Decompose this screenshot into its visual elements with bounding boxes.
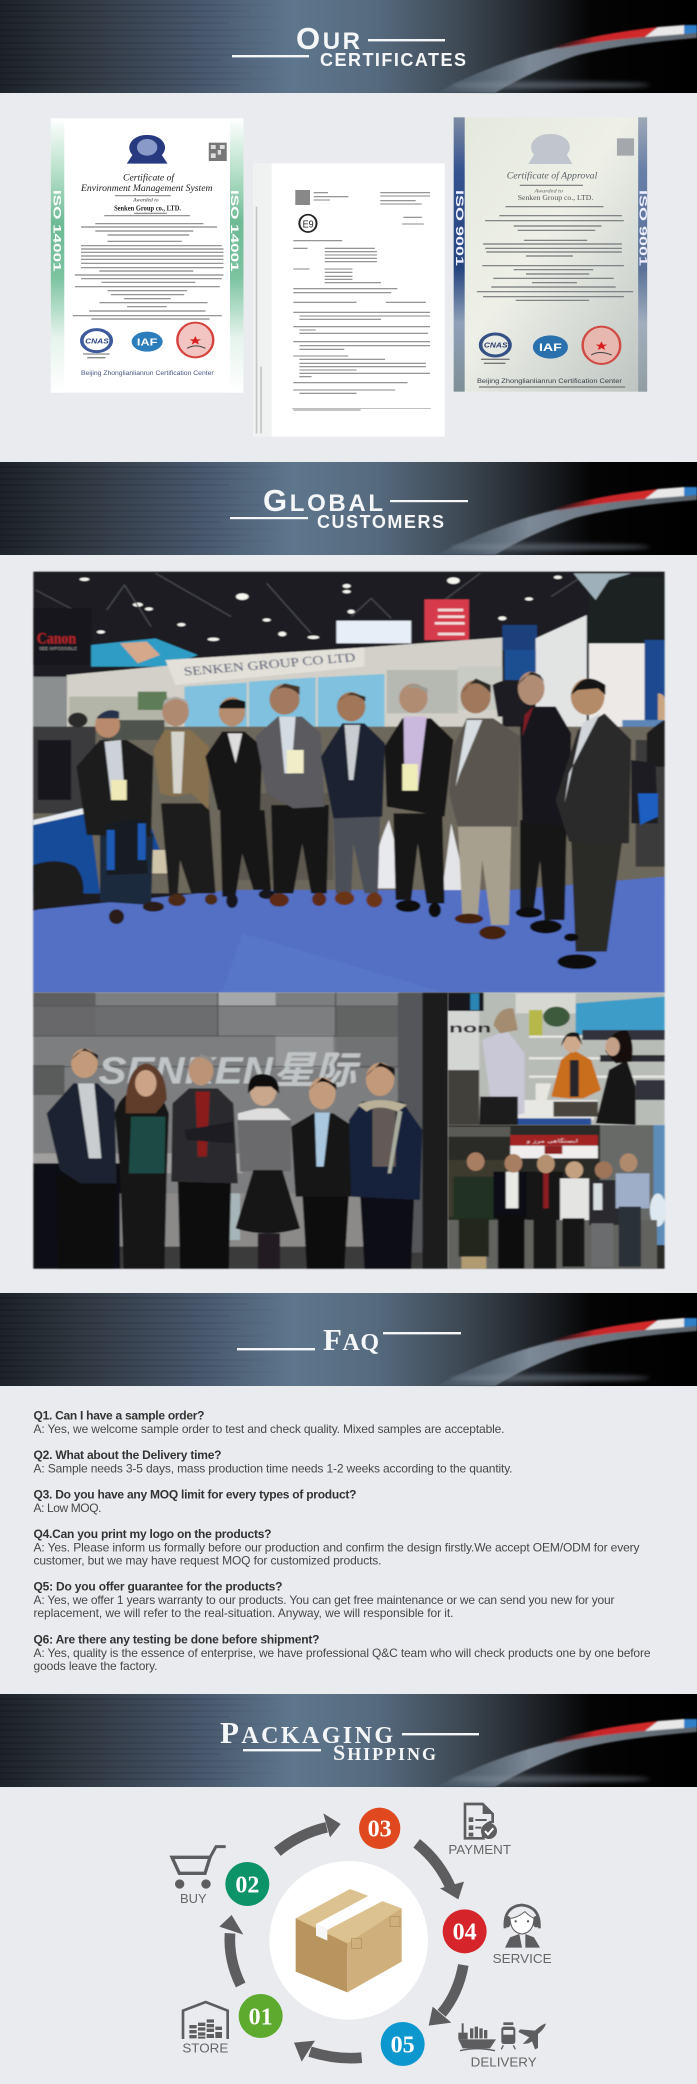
step 02 [225,1862,269,1906]
title: packaging shipping: PACKAGING [220,1715,393,1750]
certificate: ISO 14001: Certificate of [123,174,175,183]
title: our certificates: CERTIFICATES [320,50,466,70]
title: packaging shipping [220,1715,479,1765]
step 03 [359,1808,400,1849]
person d [236,1074,300,1269]
faq 4 [34,1527,640,1568]
header: faq [0,1293,697,1386]
certificate: E9 approval letter [253,163,445,437]
Canon panel [33,608,91,665]
photo: trade show group at Senken booth [32,570,666,994]
certificate: ISO 9001: CNAS [484,341,508,349]
certificate: ISO 9001 [453,117,648,392]
step 04 [443,1909,487,1953]
step 02: 02 [235,1872,259,1898]
certificate: ISO 14001: CNAS [85,337,109,345]
step 01 [239,1994,283,2038]
photo: office visit group: SENKEN星际 [99,1049,361,1092]
diagram: five step shipping cycle [170,1802,552,2070]
title: our certificates: OUR [296,21,360,56]
faq 4: A: Yes. Please inform us formally before our production and confirm the design firstly.We accept OEM/ODM for every [34,1540,640,1554]
faq 3: A: Low MOQ. [34,1501,102,1515]
panel: certificates [50,117,648,436]
icon and label: payment: PAYMENT [448,1843,511,1857]
certificate: ISO 9001: Beijing Zhonglianlianrun Certification Center [477,377,622,385]
certificate: ISO 9001: ISO 9001 [636,190,648,266]
certificate: ISO 14001: ISO 14001 [50,190,62,272]
faq 6: goods leave the factory. [34,1659,158,1673]
certificate: ISO 14001: Beijing Zhonglianlianrun Certification Center [81,369,214,377]
person 7 [449,678,520,939]
certificate: ISO 9001: IAF [539,341,562,354]
faq 5: A: Yes, we offer 1 years warranty to our products. You can get free maintenance or we can send you new for your [34,1593,614,1607]
person 1 [76,710,164,924]
person 8 [493,672,571,933]
booth wall [67,637,502,793]
certificate: ISO 14001: IAF [137,337,158,348]
certificate: E9 approval letter: E9 [303,219,314,230]
photo: trade show group at Senken booth: SEE IMPOSSIBLE [39,647,77,652]
certificate: ISO 14001: Senken Group co., LTD. [114,204,181,212]
arrow: 03 to 04 [417,1843,464,1899]
booth woman black [596,1030,636,1125]
certificate: ISO 9001: ISO 9001 [453,190,465,266]
photo: office visit group [33,993,448,1269]
step 03: 03 [368,1817,392,1843]
booth man [479,1008,525,1125]
person 5 [321,692,385,907]
icon and label: buy: BUY [180,1892,207,1906]
person f [349,1063,422,1269]
certificate: ISO 9001: Senken Group co., LTD. [518,194,593,202]
icon and label: store: STORE [182,2042,228,2056]
hanging signs [336,621,411,643]
booth woman orange [551,1032,601,1098]
faq 2: A: Sample needs 3-5 days, mass production time needs 1-2 weeks according to the quantity. [34,1462,512,1476]
icon and label: delivery: DELIVERY [471,2056,537,2070]
person 3 [205,697,275,908]
faq 2 [34,1448,512,1476]
title: global customers: GLOBAL [263,483,383,518]
faq 1 [34,1408,504,1436]
certificate: ISO 9001: Awarded to [533,189,563,194]
icon and label: store [182,2002,228,2056]
arrow: 04 to 05 [429,1965,463,2026]
arrow: 02 to 03 [277,1813,341,1852]
person e [291,1077,353,1269]
certificate: ISO 9001: Certificate of Approval [507,171,597,181]
person 2 [153,697,217,906]
step 05: 05 [391,2032,415,2058]
icon and label: payment [448,1804,511,1857]
photo row: office visit and trade show snapshots [32,992,666,1270]
person b [115,1063,169,1269]
white bags [373,820,407,888]
faq 6: Q6: Are there any testing be done before shipment? [34,1632,320,1646]
photo: trade show group at Senken booth: Canon [37,630,76,647]
faq 1: A: Yes, we welcome sample order to test and check quality. Mixed samples are acceptable. [34,1422,504,1436]
faq 4: customer, but we may have request MOQ for customized products. [34,1554,382,1568]
icon and label: delivery [458,2022,546,2070]
right booth walls [536,615,587,740]
title: global customers [230,483,468,532]
photo: booth conversation [448,993,665,1125]
step 05 [381,2022,425,2066]
faq 4: Q4.Can you print my logo on the products? [34,1527,272,1541]
faq 6: A: Yes, quality is the essence of enterprise, we have professional Q&C team who will check products one by one before [34,1646,651,1660]
faq 5: Q5: Do you offer guarantee for the products? [34,1580,282,1594]
blue carpet [33,877,665,993]
icon and label: service [493,1905,552,1966]
six men in group [453,1152,649,1269]
arrow: 01 to 02 [219,1915,243,1985]
mid area [33,727,665,893]
black duffel [33,861,84,911]
title: faq: FAQ [323,1322,379,1357]
person 6 [385,684,453,917]
header: global customers [0,462,697,555]
person a [47,1048,116,1269]
faq 3 [34,1488,356,1515]
certificate: ISO 14001: ISO 14001 [228,190,240,272]
faq 6 [34,1632,651,1673]
icon and label: service: SERVICE [493,1952,552,1966]
icon and label: buy [172,1847,226,1906]
person 4 [256,683,329,907]
step 01: 01 [249,2004,273,2030]
centre white circle [269,1861,428,2020]
person 9 [556,678,658,969]
faq 3: Q3. Do you have any MOQ limit for every types of product? [34,1488,356,1502]
title: packaging shipping: SHIPPING [333,1740,436,1765]
photo: group under red banner: ایستگاهی مرز و [526,1138,578,1144]
photo: trade show group at Senken booth: SENKEN GROUP CO LTD [183,651,356,679]
header: packaging shipping [0,1694,697,1787]
blue table [33,807,100,893]
ceiling lights [80,576,562,641]
faq text block [34,1408,651,1673]
arrow: 05 to 01 [294,2041,362,2062]
person c [171,1054,238,1269]
certificate: ISO 14001 [50,118,243,393]
faq 5 [34,1580,614,1620]
certificate: ISO 14001: Environment Management System [80,184,212,194]
photo: booth conversation: non [449,1021,491,1036]
title: our certificates [232,21,466,70]
header: our certificates [0,0,697,93]
faq 2: Q2. What about the Delivery time? [34,1448,222,1462]
people [76,672,658,969]
faq 1: Q1. Can I have a sample order? [34,1408,204,1422]
title: global customers: CUSTOMERS [317,512,444,532]
faq 5: replacement, we will refer to the real-situation. Anyway, we will responsible for it. [34,1606,454,1620]
certificate: ISO 14001: Awarded to [132,198,159,203]
step 04: 04 [453,1920,477,1946]
photo: group under red banner [448,1125,666,1269]
icon: cardboard box [296,1889,402,1992]
